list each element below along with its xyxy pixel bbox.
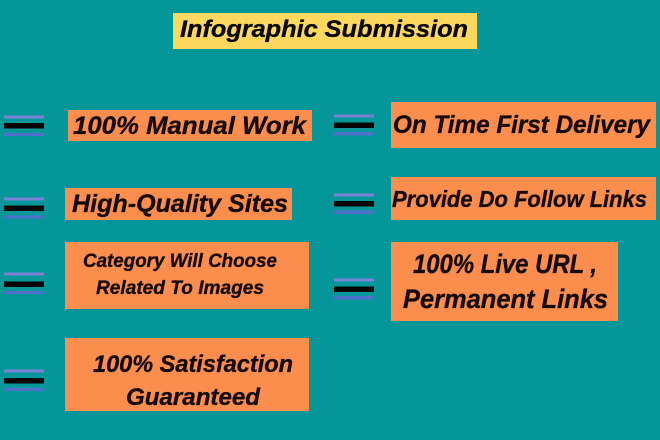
panel: 100% Live URL, Permanent Links [391,242,618,321]
icon: equals 3 [4,272,44,294]
panel: Category Will Choose Related To Images: Related To Images [96,278,264,299]
icon: equals 5 [334,114,374,136]
panel: Category Will Choose Related To Images [65,242,309,309]
panel: 100% Satisfaction Guaranteed [65,338,309,411]
title: Infographic Submission [180,16,468,43]
panel: 100% Live URL, Permanent Links: Permanent Links [403,284,608,314]
title [173,13,477,49]
icon: equals 6 [334,194,374,214]
panel: Provide Do Follow Links [391,177,656,220]
panel: On Time First Delivery [391,102,656,148]
panel: High-Quality Sites: High-Quality Sites [72,190,288,218]
panel: 100% Satisfaction Guaranteed: Guaranteed [126,384,261,411]
icon: equals 2 [4,198,44,218]
panel: Category Will Choose Related To Images: Category Will Choose [83,251,277,272]
panel: Provide Do Follow Links: Provide Do Follow Links [392,186,647,212]
icon: equals 4 [4,370,44,391]
panel: 100% Manual Work: 100% Manual Work [73,112,307,140]
icon: equals 1 [4,116,44,136]
panel: 100% Satisfaction Guaranteed: 100% Satisfaction [93,351,293,378]
panel: 100% Live URL, Permanent Links: 100% Live URL , [413,249,597,279]
icon: equals 7 [334,278,374,300]
panel: On Time First Delivery: On Time First Delivery [393,111,651,139]
